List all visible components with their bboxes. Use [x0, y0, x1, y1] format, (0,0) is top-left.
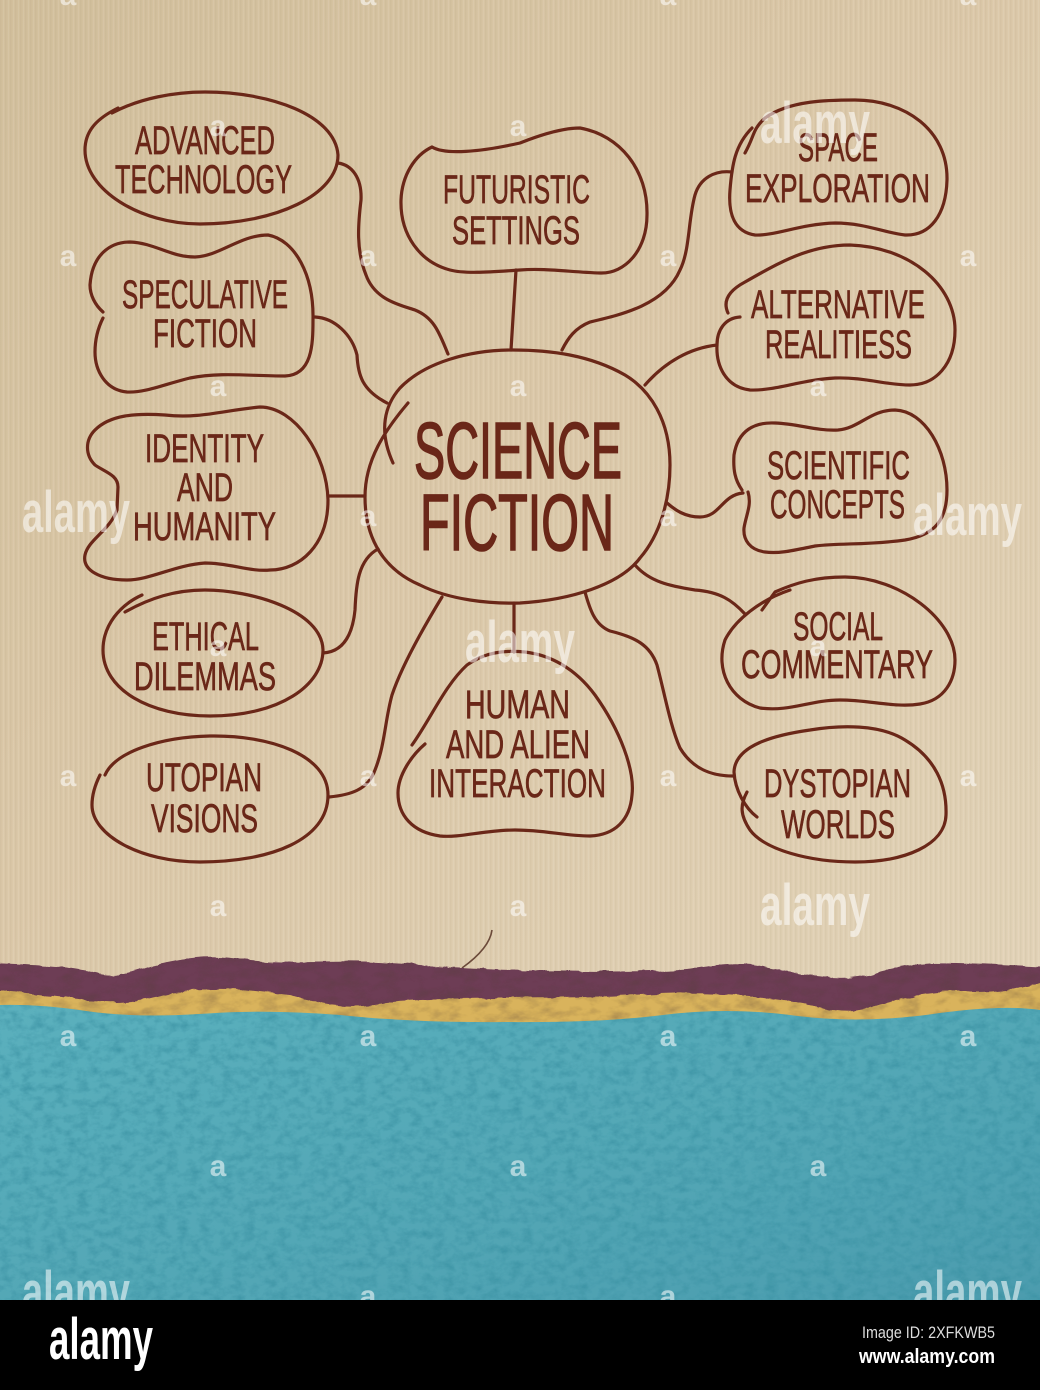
node: Ethical Dilemmas: DILEMMAS	[134, 655, 276, 699]
panel: yellow torn paper layer	[0, 980, 1040, 1050]
watermarks: a	[60, 760, 77, 793]
central node: Science Fiction	[365, 350, 670, 603]
watermarks: a	[210, 890, 227, 923]
watermarks: a	[360, 1280, 377, 1313]
node: Space Exploration	[730, 100, 947, 235]
watermarks: a	[510, 890, 527, 923]
mind map diagram	[85, 92, 955, 862]
panel: purple torn paper layer	[0, 957, 1040, 1040]
watermarks: a	[210, 110, 227, 143]
watermarks: alamy	[22, 480, 130, 545]
node: Human and Alien Interaction	[398, 651, 632, 836]
node: Human and Alien Interaction: INTERACTION	[429, 762, 606, 806]
node: Alternative Realitiess: REALITIESS	[765, 323, 912, 367]
node: Ethical Dilemmas	[103, 590, 323, 716]
watermarks: a	[660, 760, 677, 793]
node: Space Exploration: EXPLORATION	[745, 167, 930, 211]
watermarks: alamy	[22, 1260, 130, 1325]
watermarks: a	[660, 1020, 677, 1053]
node: Alternative Realitiess: ALTERNATIVE	[751, 283, 925, 327]
node: Scientific Concepts: SCIENTIFIC	[767, 444, 910, 488]
footer url: www.alamy.com	[858, 1346, 995, 1368]
node: Human and Alien Interaction: AND ALIEN	[446, 723, 590, 767]
node: Utopian Visions: VISIONS	[151, 797, 258, 841]
watermarks: a	[210, 370, 227, 403]
watermarks: a	[360, 240, 377, 273]
node: Human and Alien Interaction: HUMAN	[465, 683, 570, 727]
node: Identity and Humanity: IDENTITY	[145, 427, 264, 471]
watermarks: alamy	[760, 873, 870, 938]
central node: Science Fiction: FICTION	[420, 478, 614, 567]
node: Social Commentary: SOCIAL	[793, 605, 883, 649]
node: Utopian Visions	[92, 736, 328, 862]
watermarks: a	[60, 1020, 77, 1053]
node: Dystopian Worlds	[734, 727, 946, 862]
watermarks: a	[210, 1150, 227, 1183]
node: Dystopian Worlds: WORLDS	[781, 803, 895, 847]
node: Advanced Technology	[85, 92, 338, 224]
node: Social Commentary: COMMENTARY	[741, 643, 933, 687]
node: Ethical Dilemmas: ETHICAL	[152, 615, 259, 659]
node: Dystopian Worlds: DYSTOPIAN	[764, 762, 911, 806]
watermarks: alamy	[760, 91, 870, 156]
watermarks: a	[960, 240, 977, 273]
node: Speculative Fiction: FICTION	[153, 312, 257, 356]
watermarks: a	[960, 760, 977, 793]
node: Futuristic Settings: SETTINGS	[452, 209, 580, 253]
connector lines	[315, 163, 745, 797]
watermarks: a	[660, 500, 677, 533]
panel: blue textured paper	[0, 1005, 1040, 1300]
watermarks: a	[360, 1020, 377, 1053]
paper curl fibre	[462, 930, 492, 968]
node: Utopian Visions: UTOPIAN	[146, 756, 262, 800]
node: Space Exploration: SPACE	[798, 126, 878, 170]
node: Scientific Concepts	[734, 410, 947, 553]
node: Advanced Technology: ADVANCED	[135, 119, 275, 163]
node: Scientific Concepts: CONCEPTS	[770, 483, 905, 527]
watermarks: a	[960, 1020, 977, 1053]
node: Futuristic Settings: FUTURISTIC	[443, 168, 590, 212]
watermarks: a	[360, 500, 377, 533]
node: Identity and Humanity	[85, 407, 328, 580]
footer logo: alamy	[49, 1307, 153, 1372]
watermarks: a	[660, 240, 677, 273]
central node: Science Fiction: SCIENCE	[414, 406, 622, 495]
node: Identity and Humanity: HUMANITY	[133, 505, 276, 549]
watermarks: a	[810, 1150, 827, 1183]
watermarks: a	[210, 630, 227, 663]
panel: cream paper background	[0, 0, 1040, 1000]
node: Futuristic Settings	[401, 128, 647, 273]
node: Speculative Fiction	[90, 235, 313, 392]
watermarks: a	[360, 760, 377, 793]
node: Identity and Humanity: AND	[177, 466, 233, 510]
watermarks: a	[810, 370, 827, 403]
node: Alternative Realitiess	[717, 245, 955, 390]
watermarks: a	[510, 1150, 527, 1183]
footer image id: Image ID: 2XFKWB5	[862, 1323, 995, 1342]
footer: black credit bar	[0, 1300, 1040, 1390]
watermarks: a	[810, 630, 827, 663]
node: Advanced Technology: TECHNOLOGY	[115, 158, 292, 202]
node: Social Commentary	[722, 577, 955, 709]
watermarks: a	[510, 370, 527, 403]
watermarks: a	[660, 1280, 677, 1313]
watermarks: a	[510, 110, 527, 143]
watermarks: a	[60, 240, 77, 273]
node: Speculative Fiction: SPECULATIVE	[122, 273, 288, 317]
watermarks: alamy	[465, 610, 575, 675]
